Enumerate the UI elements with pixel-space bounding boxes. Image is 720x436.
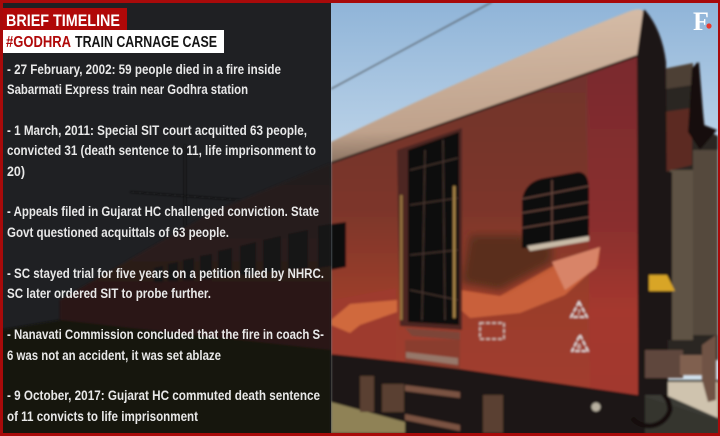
- undercarriage: [331, 350, 645, 436]
- text block: timeline entries: 6 was not an accident, it was set ablaze: [7, 348, 221, 363]
- text block: timeline entries: Sabarmati Express train near Godhra station: [7, 82, 248, 97]
- rust and bleached paint: [331, 300, 397, 333]
- yellow box: [649, 275, 675, 291]
- text block: timeline entries: - 1 March, 2011: Special SIT court acquitted 63 people,: [7, 123, 307, 138]
- text block: timeline entries: - Nanavati Commission concluded that the fire in coach S-: [7, 327, 324, 342]
- text block: timeline entries: of 11 convicts to life imprisonment: [7, 409, 198, 424]
- coach end dark: [637, 10, 668, 395]
- heading: train carnage case: [3, 30, 224, 53]
- coach roof: [331, 9, 643, 164]
- text block: timeline entries: [7, 62, 324, 424]
- photo: burnt train coach: 7: [577, 310, 581, 317]
- left window: [331, 222, 346, 270]
- photo: burnt train coach: [331, 0, 720, 436]
- text block: timeline entries: - SC stayed trial for five years on a petition filed by NHRC.: [7, 266, 324, 281]
- text block: timeline entries: SC later ordered SIT to probe further.: [7, 286, 211, 301]
- buffer: [645, 350, 683, 378]
- text block: timeline entries: convicted 31 (death sentence to 11, life imprisonment to: [7, 143, 316, 158]
- text block: timeline entries: 20): [7, 164, 25, 179]
- step under door: [405, 340, 460, 369]
- text block: timeline entries: Govt questioned acquittals of 63 people.: [7, 225, 229, 240]
- text block: timeline entries: - 27 February, 2002: 59 people died in a fire inside: [7, 62, 281, 77]
- text block: timeline entries: - Appeals filed in Gujarat HC challenged conviction. State: [7, 204, 319, 219]
- door: [397, 128, 462, 330]
- coach body: [331, 56, 638, 395]
- heading: train carnage case: TRAIN CARNAGE CASE: [75, 34, 217, 51]
- heading: brief timeline: BRIEF TIMELINE: [6, 12, 120, 30]
- overhead wire: [331, 2, 492, 89]
- warning triangles: [571, 302, 588, 351]
- rear structure: [655, 62, 718, 360]
- logo: F.: F: [693, 7, 709, 36]
- heading: train carnage case: #GODHRA: [6, 34, 71, 51]
- main window: [522, 172, 589, 248]
- dark text panel with ghosted train: [0, 0, 331, 436]
- text block: timeline entries: - 9 October, 2017: Gujarat HC commuted death sentence: [7, 388, 320, 403]
- ground right: [640, 380, 720, 436]
- photo: burnt train coach: 8: [577, 344, 581, 351]
